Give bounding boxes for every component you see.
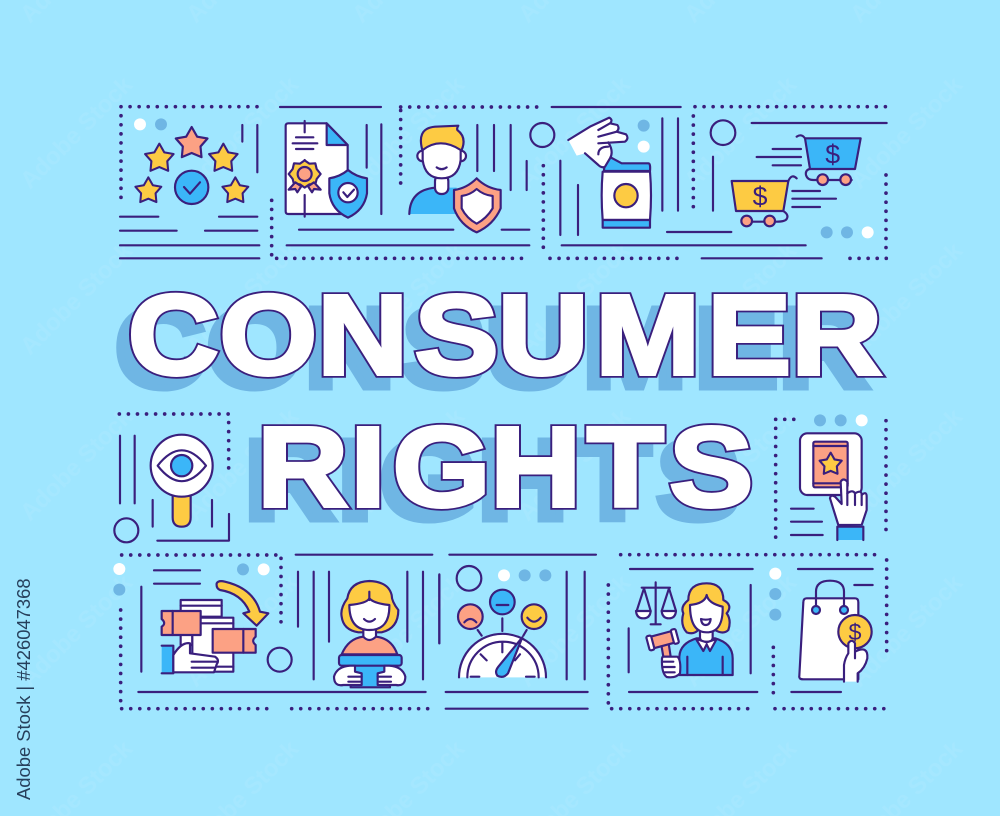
icon: blue cart: $ [825,139,840,169]
decorative circles [530,120,874,238]
panel: bottom left, refunds and woman with tablet [113,555,439,709]
panel: top left, ratings, certificate, protected person [120,107,538,258]
title outline [128,273,882,531]
icon: woman with tablet [334,581,405,687]
icon: shopping bag with coin: $ [849,619,862,645]
panel: bottom right, satisfaction, judge, shopping bag [439,555,887,709]
title: consumer rights [115,273,882,544]
icon: judge with scales and gavel [636,582,733,677]
dotted frames and rule lines [121,555,439,709]
icon: product card with pointing hand [800,433,867,540]
icon: magnifier eye [151,435,213,527]
title outline: CONSUMER [128,273,882,399]
panel: right, tapping a product [776,414,886,540]
title white fill: CONSUMER [128,273,882,399]
icon: yellow cart [732,176,836,226]
dotted frame and rule lines [114,414,229,542]
icon: shopping bag with coin [799,581,872,682]
icon: certificate with shield [286,121,367,218]
decorative dots [134,118,167,130]
title drop shadow: RIGHTS [244,418,740,544]
title white fill: RIGHTS [257,405,753,531]
icon: yellow cart: $ [753,182,768,212]
decorative circles [113,563,292,672]
decorative circles [457,566,781,621]
title outline: RIGHTS [257,405,753,531]
panel: left, magnifier with eye [114,414,229,542]
dotted frames and rule lines [439,555,887,709]
icon: man with shield [409,126,501,232]
stock id label: Adobe Stock | #426047368 [13,578,34,800]
icon: blue cart [757,135,861,185]
title drop shadow [115,286,869,544]
dotted frames and rule lines [543,107,887,258]
icon: return arrow [217,581,268,626]
icon: products, tickets and hand [162,600,256,673]
dotted frames and rule lines [120,107,538,258]
panel: top right, chip bag and shopping carts [530,107,887,258]
icon: rating stars with check [135,127,248,204]
title white fill [128,273,882,531]
icon: satisfaction gauge [458,590,546,677]
title drop shadow: CONSUMER [115,286,869,412]
dotted frame and rule lines [776,414,886,538]
icon: chip bag with hand [568,118,651,228]
